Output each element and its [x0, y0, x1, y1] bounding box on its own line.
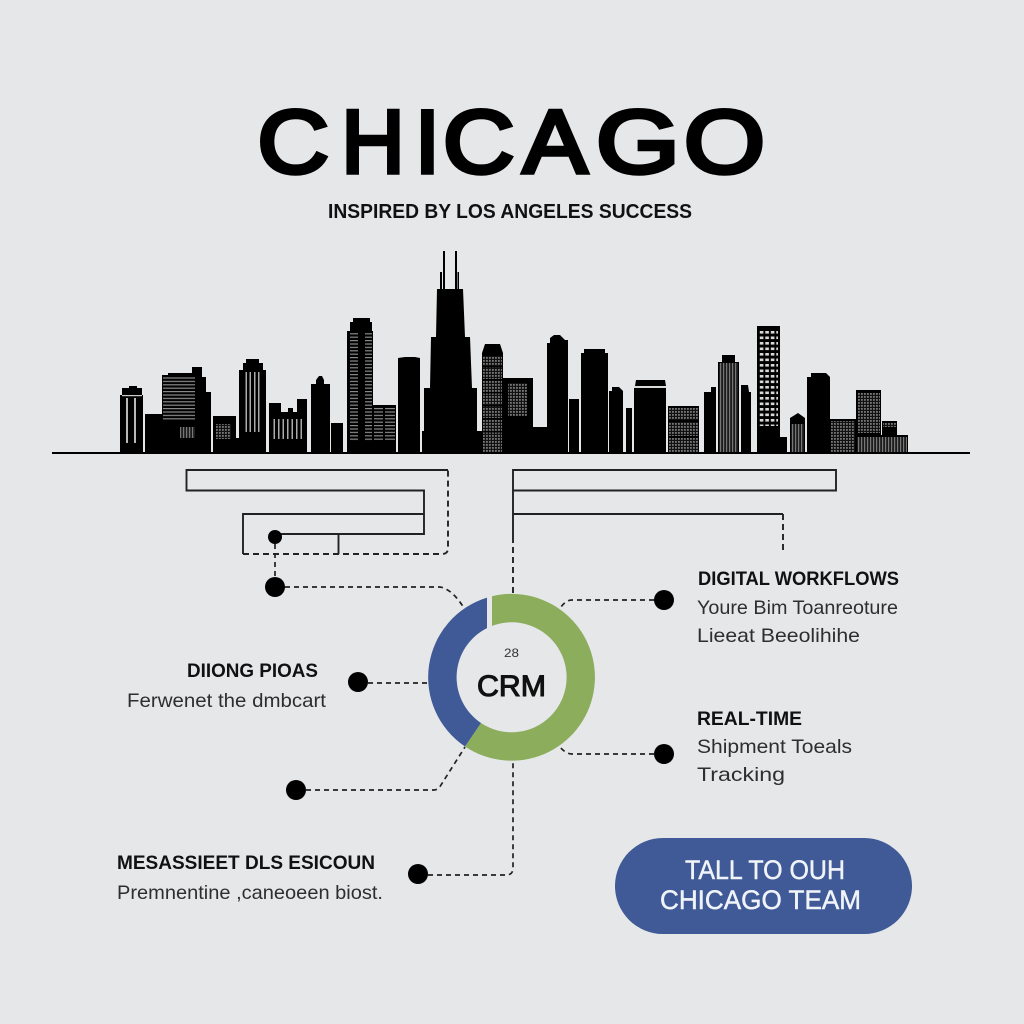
callout: real-time: REAL-TIME	[697, 708, 802, 730]
callout: diiong pioas: Ferwenet the dmbcart	[127, 690, 327, 712]
connector dots	[265, 530, 674, 884]
title	[258, 92, 765, 192]
callout: mesassieet dls esicoun: Premnentine ,caneoeen biost.	[117, 882, 383, 904]
title: G	[596, 92, 680, 191]
right bracket connector	[513, 470, 836, 595]
callout: real-time	[697, 708, 852, 786]
callout: digital workflows	[697, 568, 899, 647]
title: C	[443, 92, 514, 191]
title: O	[684, 92, 765, 192]
callout: digital workflows: Youre Bim Toanreoture	[697, 597, 898, 619]
callout: digital workflows: Lieeat Beeolihihe	[697, 625, 860, 647]
small center glyph: 28	[504, 646, 519, 660]
call to action button: TALL TO OUH	[685, 855, 845, 885]
title: I	[415, 92, 440, 192]
call to action button	[615, 838, 912, 934]
title: A	[523, 92, 587, 192]
ground line	[52, 452, 970, 454]
callout: mesassieet dls esicoun: MESASSIEET DLS ESICOUN	[117, 852, 375, 874]
building windows and stripes	[122, 330, 907, 452]
skyline	[52, 251, 970, 454]
callout: diiong pioas	[127, 660, 327, 712]
call to action button: CHICAGO TEAM	[660, 885, 861, 915]
blue segment	[428, 598, 487, 746]
callout: mesassieet dls esicoun	[117, 852, 383, 904]
green segment	[465, 594, 595, 761]
callout: digital workflows: DIGITAL WORKFLOWS	[698, 568, 899, 590]
donut chart	[428, 594, 595, 761]
center label: CRM	[477, 670, 546, 703]
callout: diiong pioas: DIIONG PIOAS	[187, 660, 318, 682]
left buildings	[120, 251, 908, 453]
left bracket connector	[186, 470, 448, 554]
callout: real-time: Tracking	[697, 764, 785, 786]
subtitle: INSPIRED BY LOS ANGELES SUCCESS	[328, 201, 692, 223]
dashed leader lines	[275, 544, 654, 875]
title: H	[342, 92, 404, 192]
title: C	[258, 92, 329, 191]
callout: real-time: Shipment Toeals	[697, 736, 852, 758]
